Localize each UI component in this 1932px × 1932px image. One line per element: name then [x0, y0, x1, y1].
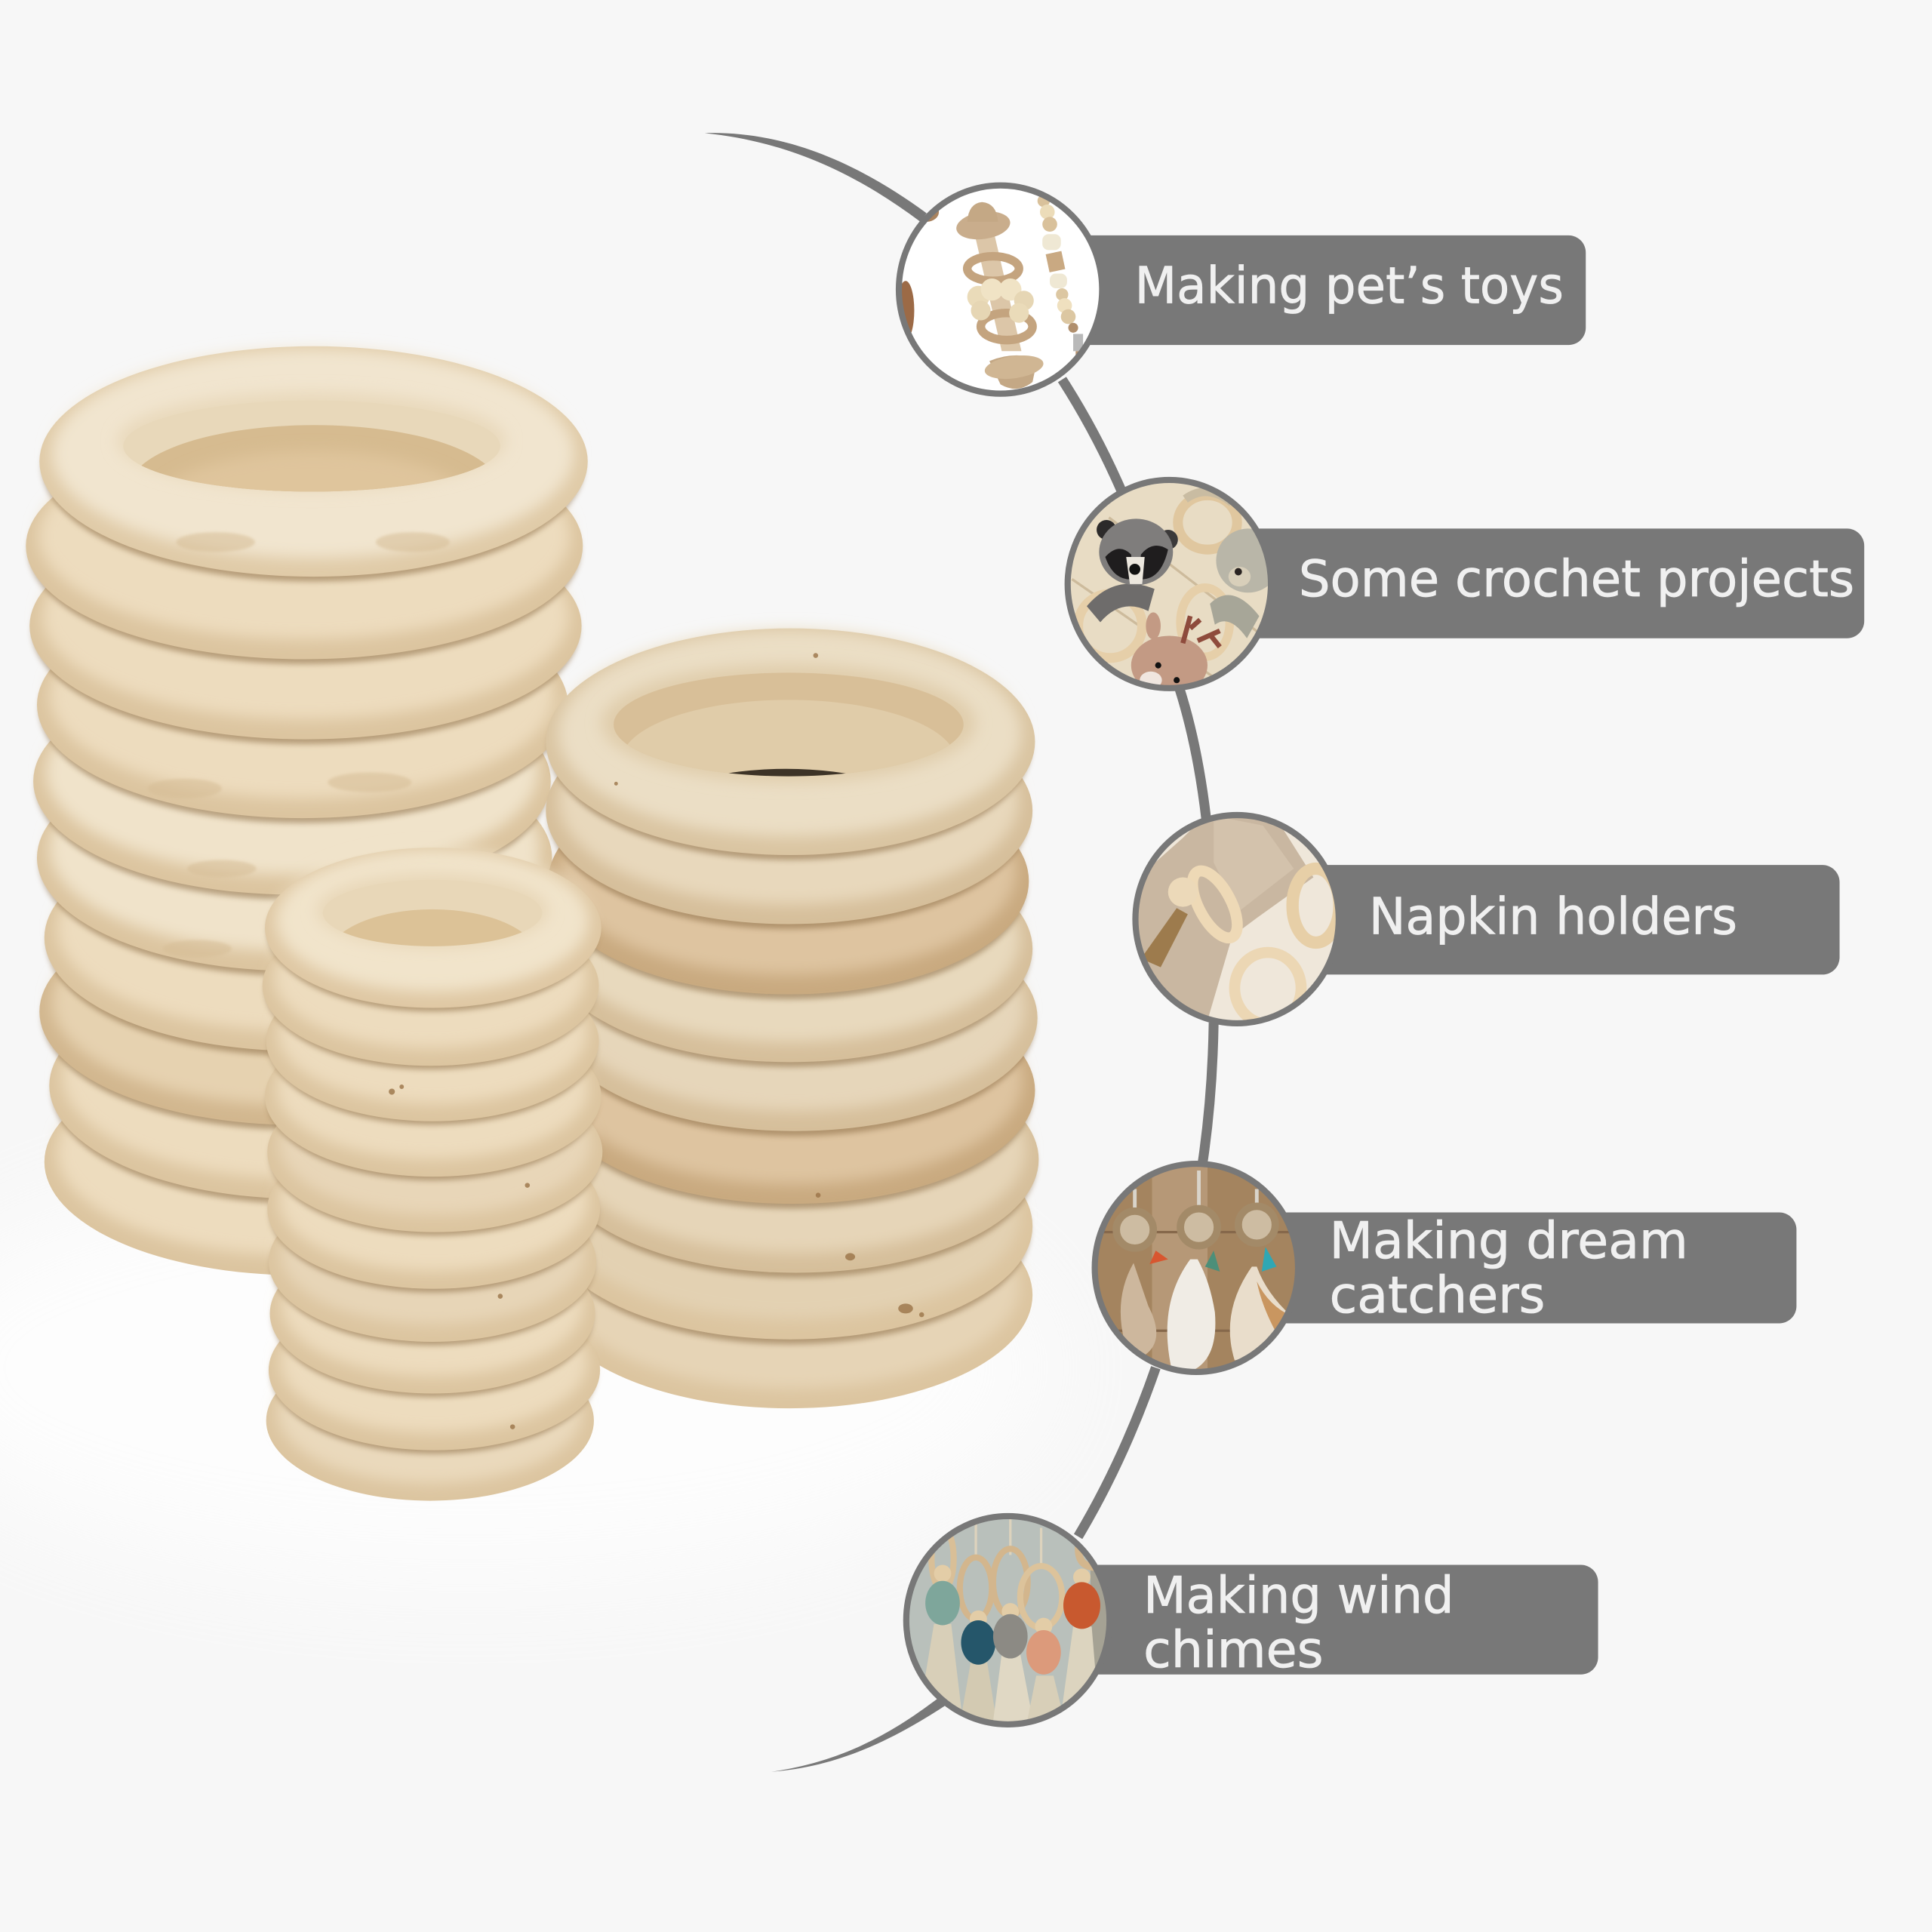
large ring stack [26, 346, 588, 1275]
label 5: wind chimes [1066, 1564, 1598, 1679]
wood grain marks [148, 532, 450, 958]
thumbnail: dream catchers [1084, 1152, 1312, 1386]
label 1: pet's toys [1060, 235, 1586, 345]
medium ring stack [546, 629, 1038, 1408]
label 5: wind chimes: chimes [1143, 1620, 1323, 1679]
label 4: dream catchers [1257, 1211, 1796, 1324]
label 2: crochet projects: Some crochet projects [1299, 549, 1854, 608]
label 4: dream catchers: Making dream [1330, 1211, 1688, 1270]
speckle marks [389, 1084, 530, 1429]
label 3: napkin holders [1294, 865, 1840, 974]
thumbnail: wooden rattle and bead string [895, 183, 1099, 397]
small ring stack [263, 848, 602, 1501]
thumbnail: napkin holders [1128, 807, 1349, 1035]
floor glow [0, 1158, 1048, 1577]
label 1: pet's toys: Making pet’s toys [1135, 257, 1564, 315]
label 5: wind chimes: Making wind [1143, 1566, 1454, 1625]
thumbnail: wind chimes [900, 1509, 1121, 1731]
connector curve [705, 133, 1214, 1772]
thumbnail: crochet animal rattles [1064, 477, 1268, 691]
small ring hole [343, 909, 522, 946]
speckle marks [614, 653, 924, 1317]
large ring hole [124, 425, 500, 492]
label 3: napkin holders: Napkin holders [1369, 888, 1737, 946]
medium ring hole [614, 673, 964, 777]
label 2: crochet projects [1232, 528, 1864, 638]
label 4: dream catchers: catchers [1330, 1266, 1545, 1324]
